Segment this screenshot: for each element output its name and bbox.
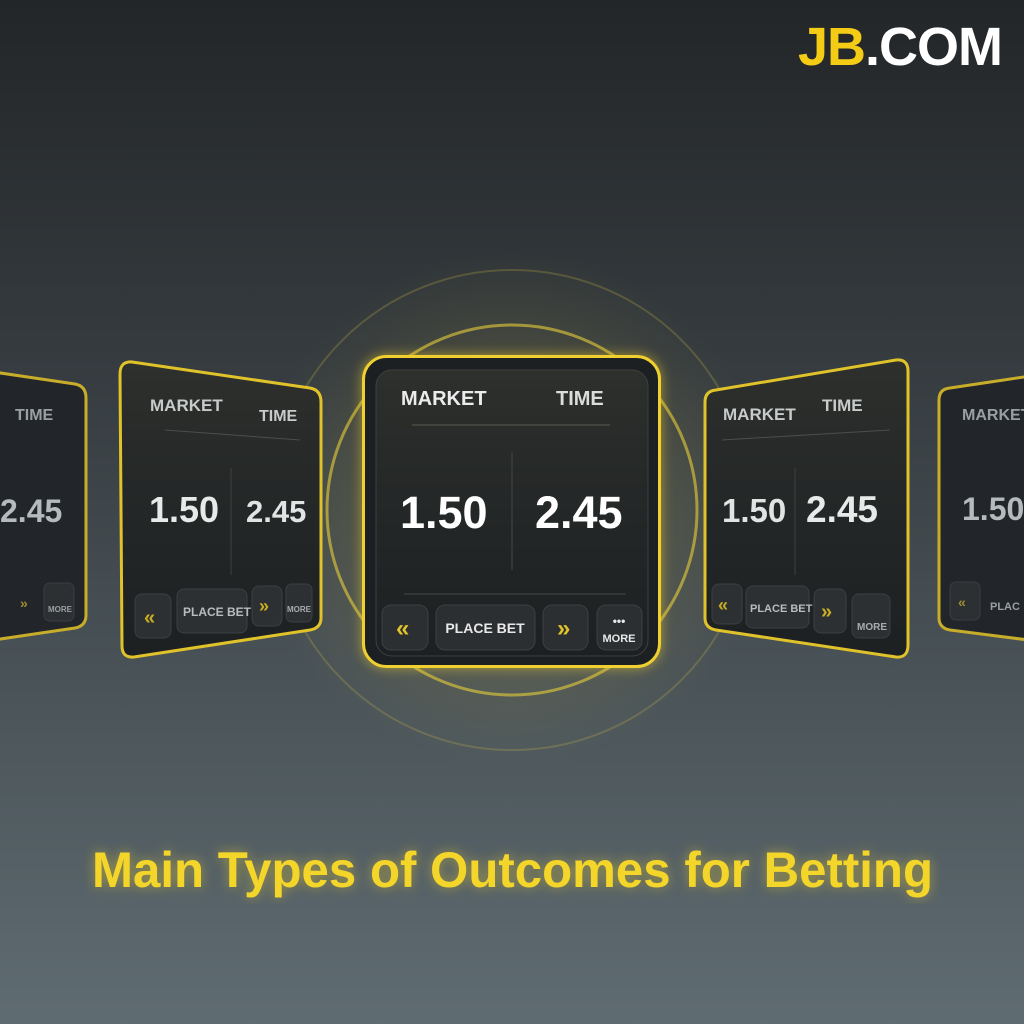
left card [120,362,321,657]
far left card: TIME [15,407,54,424]
left card: 1.50 [149,489,219,530]
button row: « [396,615,409,642]
right card: « [718,595,728,615]
far right card: « [958,594,966,610]
left card: MARKET [150,396,223,415]
right card: MORE [857,622,887,633]
center card [362,355,661,668]
right card: » [821,601,832,623]
right card [705,360,908,657]
header labels: MARKET [401,388,487,410]
button row [382,605,642,650]
right card: MARKET [723,405,796,424]
header labels: TIME [556,388,604,410]
odds values [400,487,623,538]
right card: PLACE BET [750,603,813,615]
button row: ••• [613,614,625,628]
odds values: 1.50 [400,487,488,538]
button row: PLACE BET [445,620,525,636]
logo: JB.COM [798,17,1002,77]
title: Main Types of Outcomes for Betting [92,842,933,898]
glow rings [252,250,772,770]
right card: 2.45 [806,489,878,530]
left card: MORE [287,605,312,614]
header labels [401,388,604,410]
far right card: 1.50 [962,491,1024,527]
odds values: 2.45 [535,487,623,538]
button row: » [557,615,570,642]
left card: PLACE BET [183,605,252,619]
left card: « [144,607,155,629]
button row: MORE [602,633,636,645]
left card: TIME [259,408,298,425]
right card: 1.50 [722,492,786,529]
title: Main Types of Outcomes for Betting [92,842,933,898]
left card: » [259,596,269,616]
far left card: 2.45 [0,493,62,529]
far right card: PLAC [990,601,1020,613]
far left card: MORE [48,605,73,614]
left card: 2.45 [246,494,306,529]
far left card [0,370,86,642]
right card: TIME [822,396,863,415]
far left card: » [20,595,28,611]
far right card [939,374,1024,642]
